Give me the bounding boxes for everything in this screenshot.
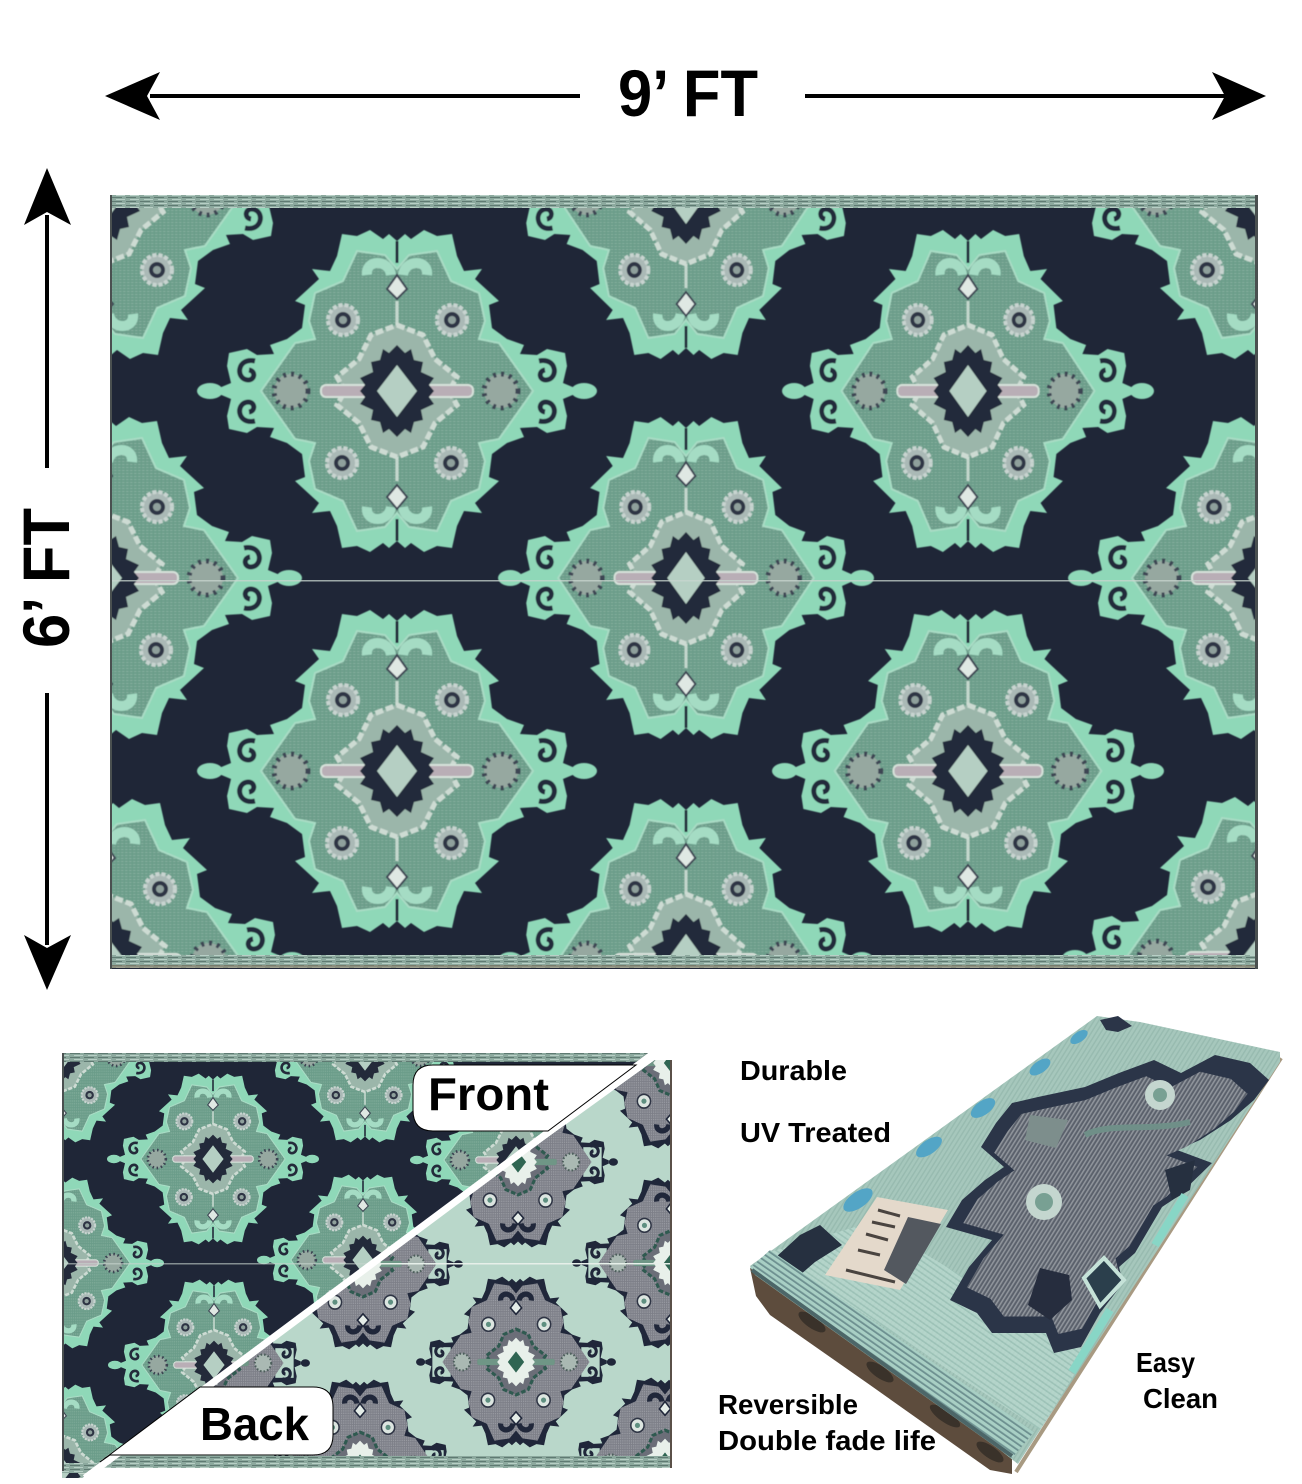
feature text: reversible: Reversible bbox=[718, 1389, 858, 1420]
feature text: easy: Easy bbox=[1136, 1347, 1195, 1378]
feature text: durable: Durable bbox=[740, 1055, 847, 1086]
dark medallion on roll bbox=[946, 1055, 1269, 1353]
roll underside bbox=[750, 1268, 1012, 1474]
tag: back: Back bbox=[200, 1398, 309, 1450]
blue accent dots bbox=[839, 1027, 1090, 1216]
side arrow: 6 ft height dimension bbox=[24, 168, 71, 990]
fold stripes on roll end bbox=[750, 1250, 1034, 1458]
feature text: clean: Clean bbox=[1143, 1383, 1218, 1414]
heading: width label: 9’ FT bbox=[618, 56, 758, 130]
fringe area near roll end bbox=[770, 1222, 1088, 1430]
tag: front: Front bbox=[428, 1068, 549, 1120]
panel: main rug front pattern bbox=[110, 195, 1258, 969]
feature text: UV treated: UV Treated bbox=[740, 1117, 891, 1148]
feature text: double fade life: Double fade life bbox=[718, 1425, 936, 1456]
top arrow: 9 ft width dimension bbox=[105, 72, 1266, 120]
diagonal divider bbox=[85, 1055, 652, 1478]
small motif at roll top bbox=[1100, 1016, 1132, 1032]
product label bbox=[825, 1197, 948, 1290]
front side of mat bbox=[62, 1053, 648, 1478]
roll top surface bbox=[750, 1016, 1280, 1464]
panel: front and back comparison bbox=[62, 1053, 672, 1478]
back side of mat bbox=[92, 1060, 672, 1468]
tag: front bbox=[413, 1065, 636, 1131]
tag: back bbox=[100, 1387, 333, 1462]
roll pattern details bbox=[775, 1080, 1195, 1320]
heading: height label: 6’ FT bbox=[9, 508, 83, 648]
panel: rolled mat photo bbox=[750, 1016, 1281, 1474]
